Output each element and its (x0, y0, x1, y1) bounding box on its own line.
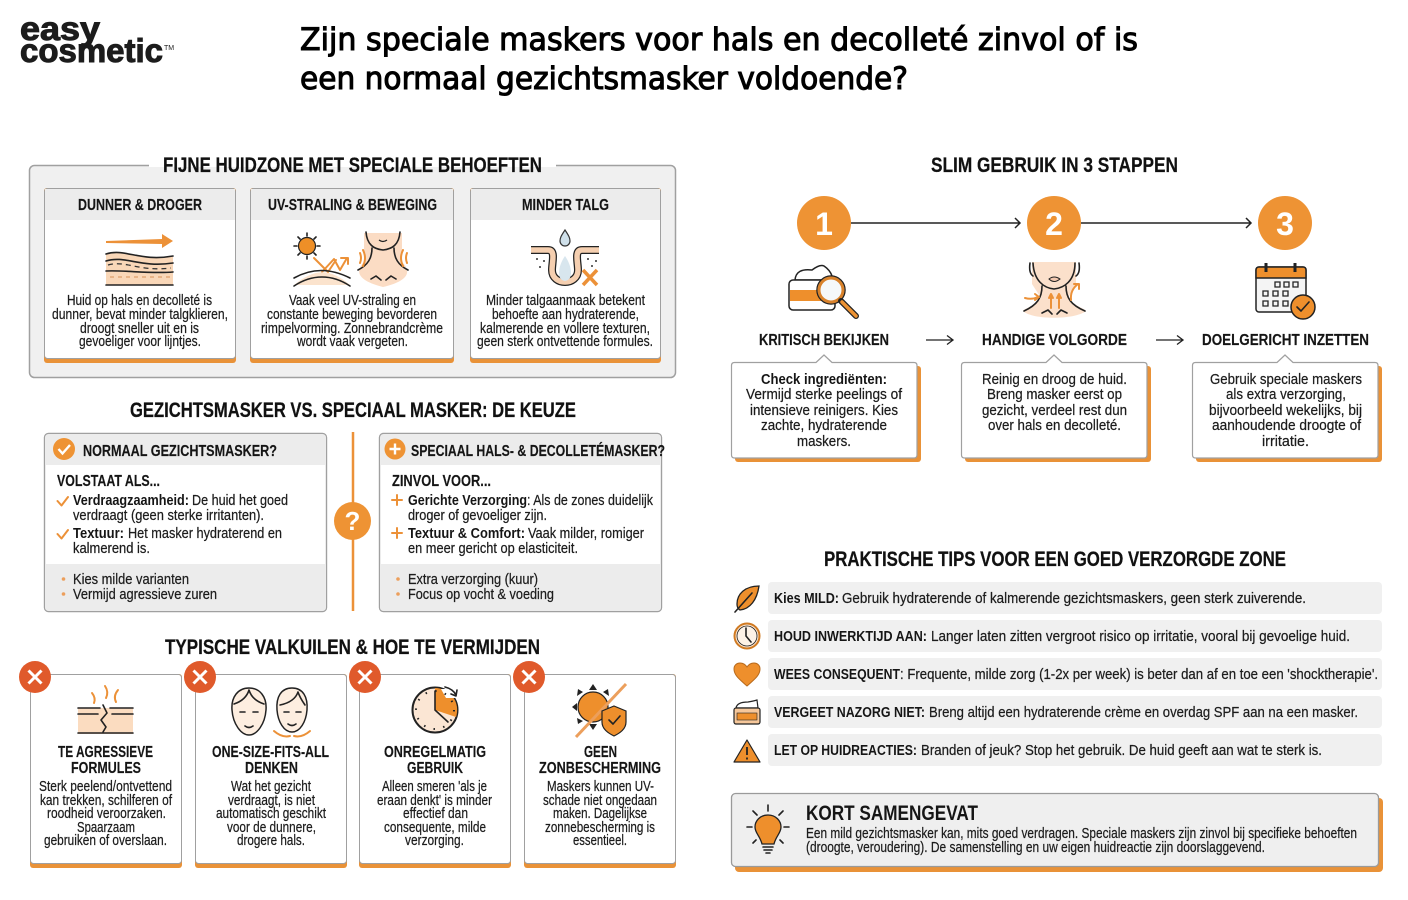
title: Zijn speciale maskers voor hals en decolleté zinvol of is (300, 22, 1138, 58)
panel: kort samengevat (732, 794, 1383, 872)
panel: normaal gezichtsmasker: Vermijd agressieve zuren (73, 587, 217, 603)
heading: gezichtsmasker vs speciaal masker: GEZICHTSMASKER VS. SPECIAAL MASKER: DE KEUZE (130, 399, 576, 422)
panel: normaal gezichtsmasker: verdraagt (geen sterke irritanten). (73, 508, 264, 524)
tip: nazorg: VERGEET NAZORG NIET: (774, 705, 925, 721)
card: te agressieve formules: Spaarzaam (77, 820, 135, 836)
card: te agressieve formules: gebruiken of overslaan. (44, 833, 167, 849)
card: onregelmatig gebruik: Alleen smeren 'als je (382, 779, 487, 795)
card: uv-straling en beweging: wordt vaak vergeten. (296, 334, 408, 350)
card: one-size-fits-all denken: automatisch geschikt (216, 806, 326, 822)
card: dunner en droger (44, 188, 236, 363)
card: one-size-fits-all denken: ONE-SIZE-FITS-ALL (212, 744, 329, 761)
card: onregelmatig gebruik (349, 661, 511, 868)
tip: inwerktijd: Langer laten zitten vergroot risico op irritatie, vooral bij gevoelige huid. (931, 629, 1350, 645)
card: one-size-fits-all denken (184, 661, 347, 868)
tip: nazorg (734, 696, 1382, 728)
logo: easy cosmetic: cosmetic (20, 32, 163, 69)
panel: normaal gezichtsmasker: Textuur: (73, 526, 124, 542)
card: geen zonbescherming: zonnebescherming is (545, 820, 655, 836)
icon: plus badge (384, 438, 406, 460)
step 3: 3 (1276, 206, 1294, 242)
logo: easy cosmetic (20, 10, 174, 69)
callout (732, 355, 921, 462)
card: geen zonbescherming (513, 661, 676, 868)
card: one-size-fits-all denken: verdraagt, is niet (228, 793, 315, 809)
card: onregelmatig gebruik: GEBRUIK (407, 760, 464, 777)
card: uv-straling en beweging (250, 188, 454, 363)
callout: Gebruik speciale maskers (1210, 372, 1362, 388)
callout: maskers. (797, 434, 851, 450)
title (300, 22, 1138, 97)
icon: heart (734, 663, 760, 686)
callout (1192, 355, 1382, 462)
icon: red x badge (184, 661, 216, 693)
divider with question mark: ? (345, 506, 360, 536)
panel: speciaal hals- en decolletémasker: droger of gevoeliger zijn. (408, 508, 547, 524)
tip: nazorg: Breng altijd een hydraterende crème en overdag SPF aan na een masker. (929, 705, 1358, 721)
panel: speciaal hals- en decolletémasker: Vaak milder, romiger (528, 526, 644, 542)
tip: huidreacties (734, 734, 1382, 766)
card: dunner en droger: Huid op hals en decolleté is (67, 293, 212, 309)
callout (962, 355, 1151, 462)
icon: check badge (53, 438, 75, 460)
logo: easy cosmetic: TM (164, 45, 174, 52)
callout: irritatie. (1262, 434, 1309, 450)
callout: zachte, hydraterende (761, 418, 887, 434)
callout: Check ingrediënten: (761, 372, 887, 388)
heading: typische valkuilen: TYPISCHE VALKUILEN & HOE TE VERMIJDEN (165, 636, 540, 659)
card: geen zonbescherming: essentieel. (573, 833, 627, 849)
panel: kort samengevat: KORT SAMENGEVAT (806, 802, 978, 825)
card: minder talg: Minder talgaanmaak betekent (486, 293, 645, 309)
logo: easy cosmetic: easy (20, 10, 101, 47)
icon: sun with shield (572, 684, 626, 737)
card: onregelmatig gebruik: verzorging. (405, 833, 464, 849)
tip: kies mild: Gebruik hydraterende of kalmerende gezichtsmaskers, geen sterk zuiverende. (842, 591, 1306, 607)
callout: bijvoorbeeld wekelijks, bij (1209, 403, 1362, 419)
card: minder talg (470, 188, 661, 363)
callout: Reinig en droog de huid. (982, 372, 1127, 388)
panel: speciaal hals- en decolletémasker: ZINVOL VOOR... (392, 473, 491, 490)
callout: Vermijd sterke peelings of (746, 387, 903, 403)
panel: speciaal hals- en decolletémasker: Focus op vocht & voeding (408, 587, 554, 603)
card: te agressieve formules: kan trekken, schilferen of (40, 793, 173, 809)
icon: cream jar (734, 700, 760, 724)
card: dunner en droger: dunner, bevat minder talgklieren, (52, 307, 228, 323)
callout: Breng masker eerst op (987, 387, 1122, 403)
heading: fijne huidzone: FIJNE HUIDZONE MET SPECIALE BEHOEFTEN (163, 154, 542, 177)
card: uv-straling en beweging: constante beweging bevorderen (267, 307, 437, 323)
icon: clock (412, 687, 458, 732)
card: minder talg: behoefte aan hydraterende, (492, 307, 639, 323)
card: one-size-fits-all denken: drogere hals. (237, 833, 305, 849)
heading: slim gebruik: SLIM GEBRUIK IN 3 STAPPEN (931, 154, 1178, 177)
icon: red x badge (19, 661, 51, 693)
step 3 (1192, 196, 1382, 462)
icon: two faces (232, 688, 310, 736)
step 2 (962, 196, 1151, 462)
card: minder talg: kalmerende en vollere texturen, (480, 321, 650, 337)
icon: pore with droplet (531, 230, 599, 285)
icon: neck with arrows (1023, 262, 1086, 318)
panel: speciaal hals- en decolletémasker: SPECIAAL HALS- & DECOLLETÉMASKER? (411, 443, 665, 460)
panel: normaal gezichtsmasker: Het masker hydraterend en (128, 526, 282, 542)
panel: normaal gezichtsmasker: kalmerend is. (73, 541, 150, 557)
panel: normaal gezichtsmasker: VOLSTAAT ALS... (57, 473, 160, 490)
tip: kies mild (735, 582, 1382, 614)
icon: red x badge (349, 661, 381, 693)
tip: consequent: WEES CONSEQUENT (774, 667, 900, 683)
tip: kies mild: Kies MILD: (774, 591, 839, 607)
card: geen zonbescherming: GEEN (584, 744, 617, 761)
card: uv-straling en beweging: UV-STRALING & BEWEGING (268, 197, 437, 214)
panel: normaal gezichtsmasker: Kies milde varianten (73, 572, 189, 588)
tip: huidreacties: Branden of jeuk? Stop het gebruik. De huid geeft aan wat te sterk is. (921, 743, 1322, 759)
arrow: title 1 to 2 (926, 336, 953, 344)
card: te agressieve formules: Sterk peelend/ontvettend (39, 779, 172, 795)
icon: cracked skin (78, 686, 133, 734)
step 3: DOELGERICHT INZETTEN (1202, 332, 1369, 349)
panel: normaal gezichtsmasker: Verdraagzaamheid: (73, 493, 189, 509)
card: geen zonbescherming: Maskers kunnen UV- (547, 779, 654, 795)
icon: leaf (735, 586, 759, 612)
card: one-size-fits-all denken: Wat het gezicht (231, 779, 311, 795)
icon: calendar with check (1256, 263, 1315, 319)
card: minder talg: MINDER TALG (522, 197, 609, 214)
card: one-size-fits-all denken: DENKEN (245, 760, 298, 777)
callout: over hals en decolleté. (988, 418, 1121, 434)
card: onregelmatig gebruik: ONREGELMATIG (384, 744, 486, 761)
card: geen zonbescherming: schade niet ongedaan (543, 793, 657, 809)
card: onregelmatig gebruik: consequente, milde (384, 820, 486, 836)
icon: light bulb (747, 805, 789, 853)
panel: speciaal hals- en decolletémasker: en meer gericht op elasticiteit. (408, 541, 578, 557)
panel: normaal gezichtsmasker (44, 434, 326, 612)
title: een normaal gezichtsmasker voldoende? (300, 61, 908, 97)
divider with question mark (334, 432, 371, 611)
panel: normaal gezichtsmasker: NORMAAL GEZICHTSMASKER? (83, 443, 277, 460)
arrow: step 2 to 3 (1081, 218, 1251, 228)
card: uv-straling en beweging: Vaak veel UV-straling en (289, 293, 416, 309)
callout: als extra verzorging, (1226, 387, 1346, 403)
card: te agressieve formules (19, 661, 182, 868)
card: geen zonbescherming: maken. Dagelijkse (553, 806, 647, 822)
card: dunner en droger: droogt sneller uit en is (80, 321, 199, 337)
panel: speciaal hals- en decolletémasker: Textuur & Comfort: (408, 526, 525, 542)
callout: intensieve reinigers. Kies (750, 403, 898, 419)
card: one-size-fits-all denken: voor de dunnere, (227, 820, 316, 836)
panel: normaal gezichtsmasker: De huid het goed (192, 493, 288, 509)
callout: aanhoudende droogte of (1212, 418, 1362, 434)
card: onregelmatig gebruik: eraan denkt' is minder (377, 793, 492, 809)
card: te agressieve formules: FORMULES (71, 760, 141, 777)
panel: kort samengevat: (droogte, veroudering). De samenstelling en uw eigen huidreactie zijn doorslaggevend. (806, 840, 1265, 856)
card: minder talg: geen sterk ontvettende formules. (477, 334, 653, 350)
card: dunner en droger: DUNNER & DROGER (78, 197, 202, 214)
panel: speciaal hals- en decolletémasker (380, 434, 665, 612)
panel: fijne huidzone (30, 154, 676, 378)
icon: jar with magnifier (789, 266, 856, 316)
card: te agressieve formules: roodheid veroorzaken. (47, 806, 166, 822)
heading: praktische tips: PRAKTISCHE TIPS VOOR EEN GOED VERZORGDE ZONE (824, 548, 1286, 571)
step 1 (732, 196, 921, 462)
step 2: 2 (1045, 206, 1063, 242)
icon: red x badge (513, 661, 545, 693)
icon: clock (734, 624, 760, 648)
tip: inwerktijd (734, 620, 1382, 652)
tip: huidreacties: LET OP HUIDREACTIES: (774, 743, 917, 759)
tip: consequent (734, 658, 1382, 690)
card: onregelmatig gebruik: effectief dan (403, 806, 468, 822)
panel: speciaal hals- en decolletémasker: : Als de zones duidelijk (527, 493, 654, 509)
callout: gezicht, verdeel rest dun (982, 403, 1127, 419)
icon: skin layers with arrow (106, 234, 173, 285)
icon: sun and neck (294, 232, 408, 287)
card: dunner en droger: gevoeliger voor lijntjes. (79, 334, 201, 350)
arrow: step 1 to 2 (851, 218, 1020, 228)
step 1: KRITISCH BEKIJKEN (759, 332, 889, 349)
arrow: title 2 to 3 (1156, 336, 1183, 344)
card: te agressieve formules: TE AGRESSIEVE (58, 744, 153, 761)
step 2: HANDIGE VOLGORDE (982, 332, 1127, 349)
card: uv-straling en beweging: rimpelvorming. Zonnebrandcrème (261, 321, 443, 337)
tip: inwerktijd: HOUD INWERKTIJD AAN: (774, 629, 927, 645)
panel: speciaal hals- en decolletémasker: Gerichte Verzorging (408, 493, 527, 509)
card: geen zonbescherming: ZONBESCHERMING (539, 760, 661, 777)
icon: warning triangle (734, 740, 760, 762)
panel: speciaal hals- en decolletémasker: Extra verzorging (kuur) (408, 572, 538, 588)
step 1: 1 (815, 206, 833, 242)
